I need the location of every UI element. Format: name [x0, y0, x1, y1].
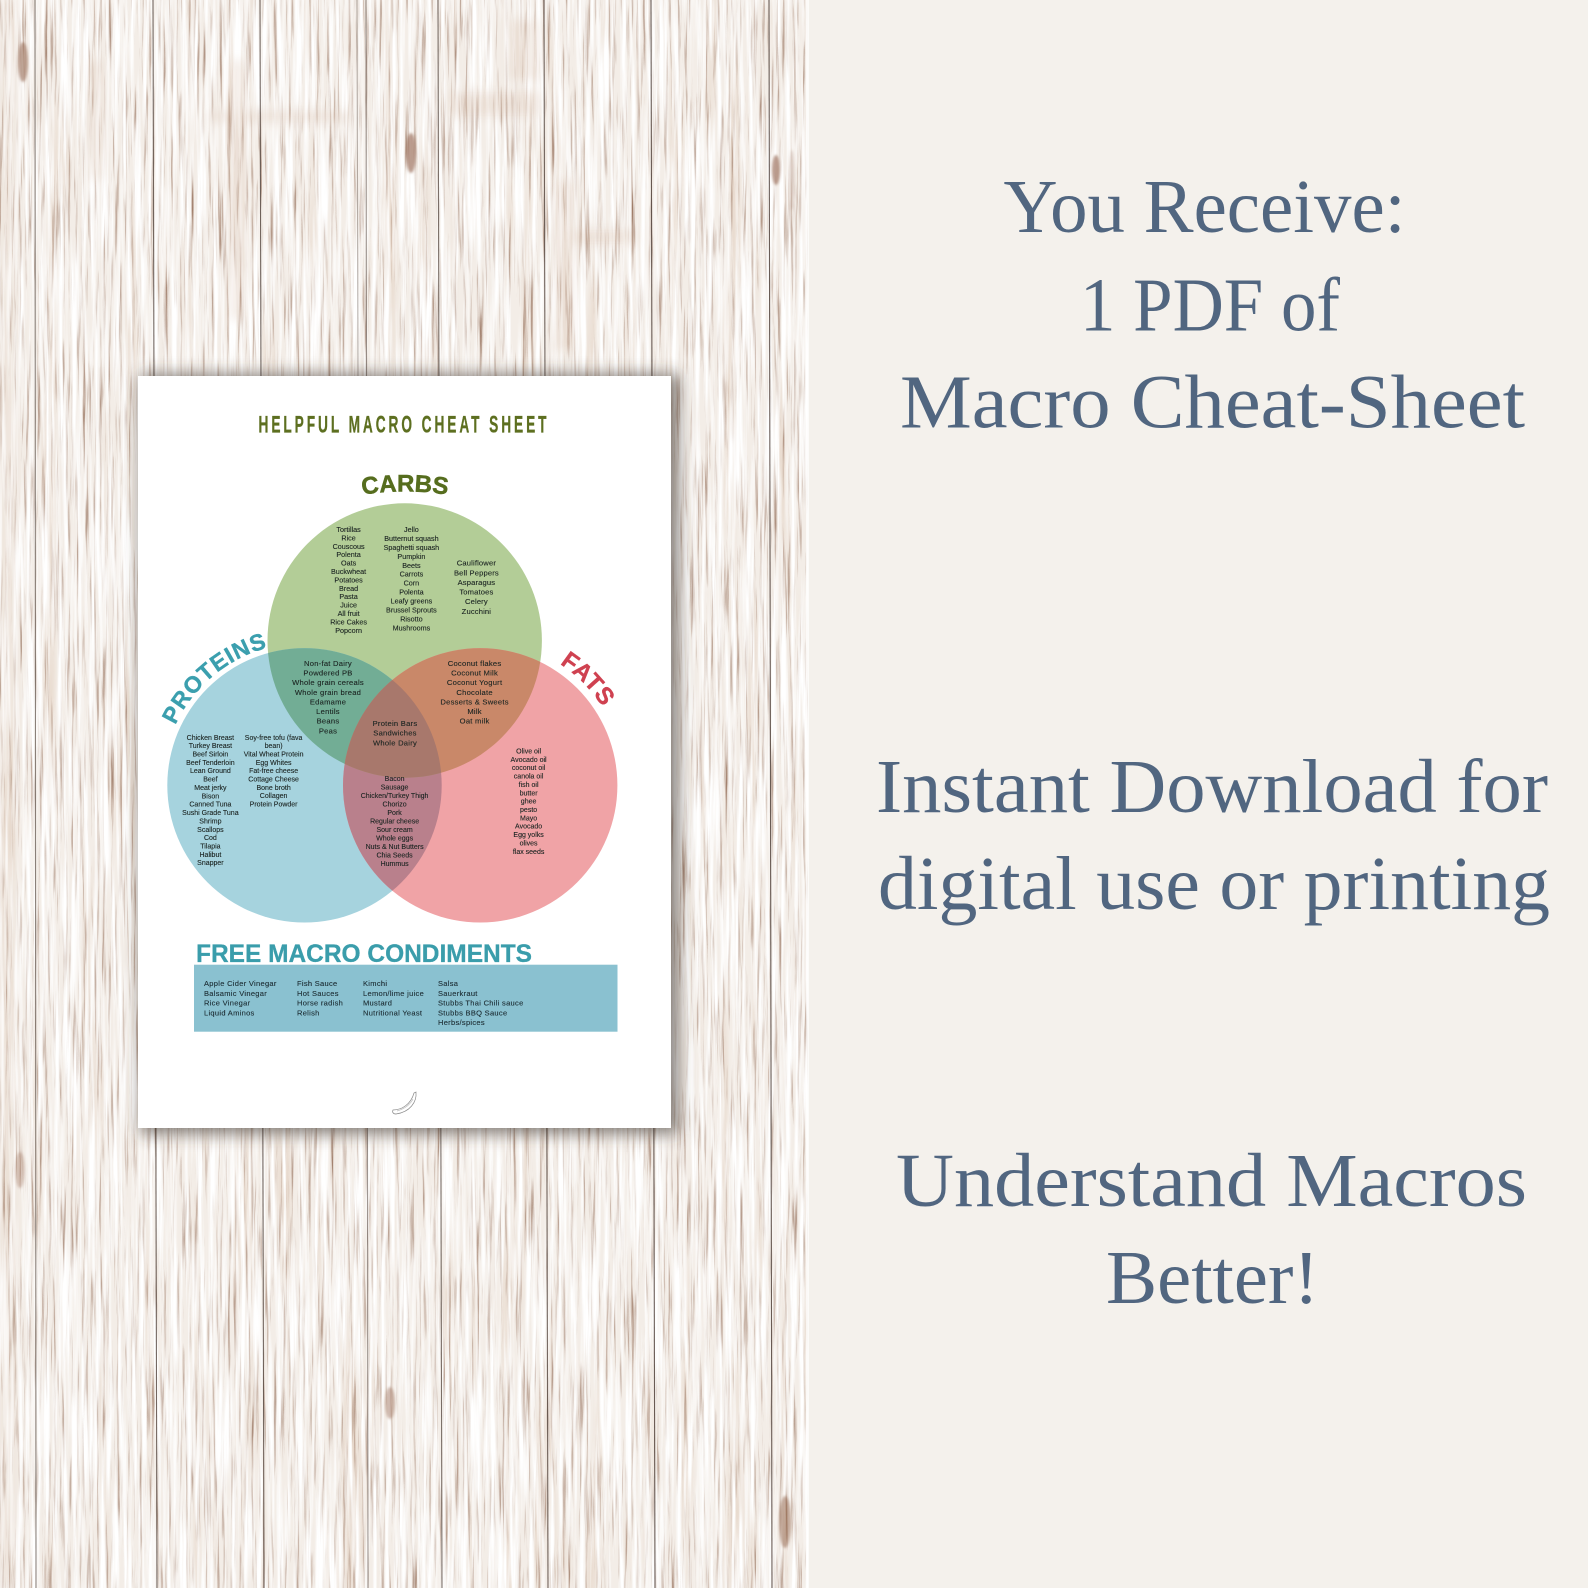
list: proteins column 1: Chicken Breast	[187, 735, 234, 742]
list: proteins column 2: Bone broth	[256, 785, 291, 792]
list: condiments column 4: Salsa	[438, 979, 459, 988]
list: condiments column 3: Lemon/lime juice	[363, 989, 424, 998]
panel: condiments list	[194, 965, 618, 1032]
list: carbs column 3: Bell Peppers	[454, 568, 499, 577]
list: carbs and proteins: Beans	[317, 717, 339, 726]
list: proteins column 1: Beef	[203, 777, 218, 784]
list: condiments column 2: Fish Sauce	[297, 979, 338, 988]
list: proteins column 1: Lean Ground	[190, 768, 231, 775]
list: carbs column 2: Beets	[402, 561, 421, 570]
text: understand macros: Understand Macros	[896, 1139, 1527, 1223]
list: condiments column 1: Liquid Aminos	[204, 1008, 255, 1017]
list: carbs and proteins: Peas	[319, 726, 337, 735]
list: proteins column 2: Protein Powder	[250, 801, 298, 808]
list: condiments column 4: Stubbs BBQ Sauce	[438, 1008, 507, 1017]
list: fats: olives	[520, 840, 538, 847]
text: instant download	[876, 745, 1550, 926]
list: carbs column 3: Celery	[465, 597, 488, 606]
title: HELPFUL MACRO CHEAT SHEET	[258, 412, 549, 439]
list: carbs and fats: Coconut Yogurt	[447, 678, 503, 687]
list: proteins column 1: Meat jerky	[194, 785, 227, 792]
list: condiments column 1: Apple Cider Vinegar	[204, 979, 277, 988]
list: carbs column 1: Couscous	[333, 542, 365, 551]
wood plank background	[0, 0, 809, 1588]
panel: macro cheat sheet page	[138, 376, 671, 1128]
list: all three macros: Sandwiches	[373, 729, 417, 738]
sheet drop shadow	[140, 374, 679, 1134]
list: proteins column 2: Egg Whites	[256, 760, 292, 767]
overlap: carbs and proteins	[268, 648, 440, 778]
list: carbs and fats: Oat milk	[460, 717, 490, 726]
icon: banana logo	[393, 1092, 416, 1114]
list: condiments column 4: Sauerkraut	[438, 989, 478, 998]
heading: free macro condiments: FREE MACRO CONDIMENTS	[196, 940, 532, 968]
list: carbs column 2: Carrots	[400, 570, 424, 579]
list: proteins column 2: Vital Wheat Protein	[244, 751, 304, 758]
list: carbs column 2: Pumpkin	[397, 552, 425, 561]
list: proteins column 1: Canned Tuna	[189, 802, 232, 809]
list: carbs and proteins: Powdered PB	[303, 669, 353, 678]
list: fats: Avocado	[515, 824, 542, 831]
list: proteins and fats: Chicken/Turkey Thigh	[361, 793, 429, 800]
list: condiments column 2: Horse radish	[297, 999, 343, 1008]
list: fats: butter	[520, 790, 538, 797]
list: carbs column 3: Tomatoes	[459, 588, 494, 597]
list: carbs and proteins: Whole grain cereals	[292, 678, 364, 687]
text: instant download: digital use or printing	[878, 842, 1550, 926]
label: fats: FATS	[560, 650, 614, 704]
list: proteins and fats: Pork	[387, 810, 402, 817]
list: proteins column 2: Soy-free tofu (fava	[245, 735, 302, 742]
list: fats: ghee	[521, 799, 536, 806]
list: carbs column 2: Mushrooms	[393, 623, 431, 632]
list: carbs and fats: Chocolate	[456, 688, 493, 697]
list: fats: canola oil	[514, 774, 544, 781]
list: proteins column 1: Tilapia	[200, 843, 221, 850]
list: carbs column 3: Cauliflower	[457, 559, 496, 568]
list: proteins column 1: Turkey Breast	[189, 743, 232, 750]
list: proteins column 1: Beef Tenderloin	[186, 760, 235, 767]
circle: proteins	[167, 648, 442, 922]
text: instant download: Instant Download for	[876, 745, 1548, 829]
list: carbs column 2: Butternut squash	[384, 534, 439, 543]
text: you receive	[900, 165, 1525, 444]
list: proteins column 1: Halibut	[200, 852, 221, 859]
list: carbs and proteins: Lentils	[316, 707, 340, 716]
list: carbs column 1: Popcorn	[335, 626, 362, 635]
list: all three macros: Whole Dairy	[373, 738, 417, 747]
list: proteins column 1: Sushi Grade Tuna	[182, 810, 239, 817]
list: proteins column 1: Scallops	[197, 827, 224, 834]
list: carbs column 1: Rice	[341, 533, 356, 542]
list: condiments column 1: Rice Vinegar	[204, 999, 251, 1008]
list: fats: coconut oil	[512, 765, 546, 772]
list: proteins and fats: Regular cheese	[370, 818, 419, 825]
list: proteins column 2: bean)	[265, 743, 283, 750]
overlap: proteins and fats	[343, 764, 442, 891]
list: fats: flax seeds	[513, 849, 545, 856]
list: proteins and fats: Chorizo	[383, 801, 407, 808]
overlap: carbs and fats	[344, 648, 540, 778]
venn diagram	[162, 474, 618, 922]
list: condiments column 4: Stubbs Thai Chili sauce	[438, 999, 524, 1008]
list: proteins and fats: Chia Seeds	[376, 852, 413, 859]
list: carbs column 1: Rice Cakes	[330, 617, 367, 626]
list: condiments column 2: Hot Sauces	[297, 989, 339, 998]
list: proteins and fats: Sausage	[381, 784, 409, 791]
list: condiments column 3: Kimchi	[363, 979, 387, 988]
list: condiments column 1: Balsamic Vinegar	[204, 989, 267, 998]
list: proteins and fats: Whole eggs	[376, 835, 414, 842]
list: carbs column 2: Leafy greens	[391, 597, 433, 606]
list: fats: pesto	[520, 807, 537, 814]
list: fats: fish oil	[519, 782, 539, 789]
list: proteins and fats: Nuts & Nut Butters	[366, 844, 424, 851]
list: proteins column 1: Shrimp	[199, 818, 222, 825]
list: fats: Mayo	[520, 815, 537, 822]
list: carbs column 1: Polenta	[336, 550, 361, 559]
list: proteins and fats: Bacon	[385, 776, 405, 783]
circle: fats	[343, 648, 617, 922]
list: proteins column 2: Fat-free cheese	[249, 768, 298, 775]
text: you receive: You Receive:	[1004, 165, 1406, 249]
list: carbs column 1: Buckwheat	[331, 567, 366, 576]
list: carbs column 3: Asparagus	[458, 578, 495, 587]
list: carbs and fats: Coconut Milk	[451, 669, 498, 678]
list: proteins column 1: Bison	[202, 793, 219, 800]
list: fats: Olive oil	[516, 748, 541, 756]
list: fats: Avocado oil	[511, 757, 547, 764]
list: condiments column 3: Mustard	[363, 999, 392, 1008]
list: carbs and proteins: Edamame	[310, 697, 346, 706]
list: carbs column 2: Brussel Sprouts	[386, 605, 437, 614]
list: proteins column 1: Beef Sirloin	[193, 752, 228, 759]
label: proteins: PROTEINS	[162, 634, 266, 724]
list: carbs column 1: Juice	[340, 601, 357, 610]
text: you receive: 1 PDF of	[1080, 264, 1341, 348]
list: carbs and fats: Milk	[467, 707, 482, 716]
overlap: all three	[344, 680, 441, 778]
list: proteins and fats: Sour cream	[377, 827, 413, 834]
list: carbs column 3: Zucchini	[462, 607, 491, 616]
list: proteins and fats: Hummus	[381, 861, 409, 868]
list: carbs column 2: Corn	[404, 579, 419, 588]
list: fats: Egg yolks	[513, 832, 544, 839]
list: condiments column 2: Relish	[297, 1008, 320, 1017]
text: understand macros: Better!	[1106, 1236, 1319, 1320]
label: carbs: CARBS	[362, 474, 448, 494]
list: proteins column 2: Cottage Cheese	[248, 776, 299, 783]
list: carbs column 1: Tortillas	[336, 525, 361, 534]
list: carbs column 2: Spaghetti squash	[384, 543, 439, 552]
list: carbs column 1: Pasta	[339, 592, 358, 601]
list: carbs column 2: Jello	[404, 525, 419, 534]
list: proteins column 1: Cod	[204, 835, 217, 842]
list: all three macros: Protein Bars	[373, 719, 417, 728]
list: condiments column 3: Nutritional Yeast	[363, 1008, 423, 1017]
text: you receive: Macro Cheat-Sheet	[900, 360, 1525, 444]
list: carbs and proteins: Whole grain bread	[295, 688, 361, 697]
text: understand macros	[896, 1139, 1527, 1320]
list: carbs and proteins: Non-fat Dairy	[304, 659, 352, 668]
list: carbs column 1: All fruit	[338, 609, 360, 618]
list: carbs column 2: Risotto	[400, 614, 423, 623]
list: proteins column 2: Collagen	[260, 793, 288, 800]
list: carbs column 1: Oats	[341, 559, 357, 568]
list: carbs column 1: Potatoes	[334, 575, 363, 584]
list: carbs and fats: Coconut flakes	[448, 659, 501, 668]
list: proteins column 1: Snapper	[197, 860, 224, 867]
list: carbs and fats: Desserts & Sweets	[440, 697, 509, 706]
list: carbs column 2: Polenta	[399, 588, 424, 597]
list: carbs column 1: Bread	[339, 584, 358, 593]
list: condiments column 4: Herbs/spices	[438, 1018, 485, 1027]
circle: carbs	[268, 503, 542, 778]
